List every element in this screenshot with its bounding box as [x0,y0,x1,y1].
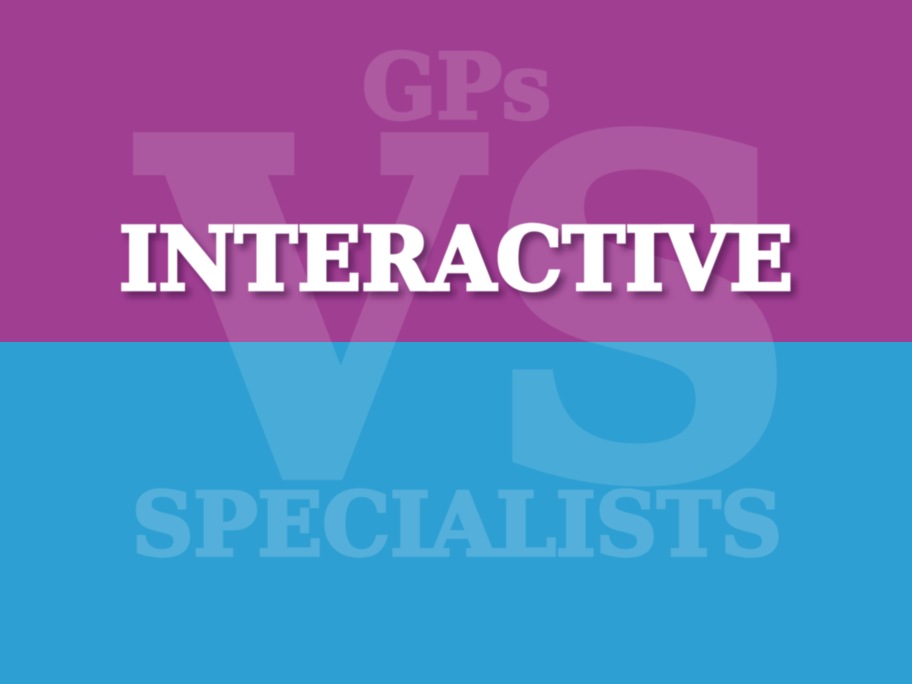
panel: purple top band [0,0,912,342]
ghost letter V: V [136,46,484,580]
title shadow: INTERACTIVE: INTERACTIVE [124,213,798,316]
title: INTERACTIVE: INTERACTIVE [119,208,793,310]
ghost letter S: S [487,46,795,580]
ghost heading: VS [136,46,795,580]
ghost heading: SPECIALISTS: SPECIALISTS [132,473,782,576]
ghost heading: GPs: GPs [362,34,551,140]
panel: blue bottom band [0,342,912,684]
